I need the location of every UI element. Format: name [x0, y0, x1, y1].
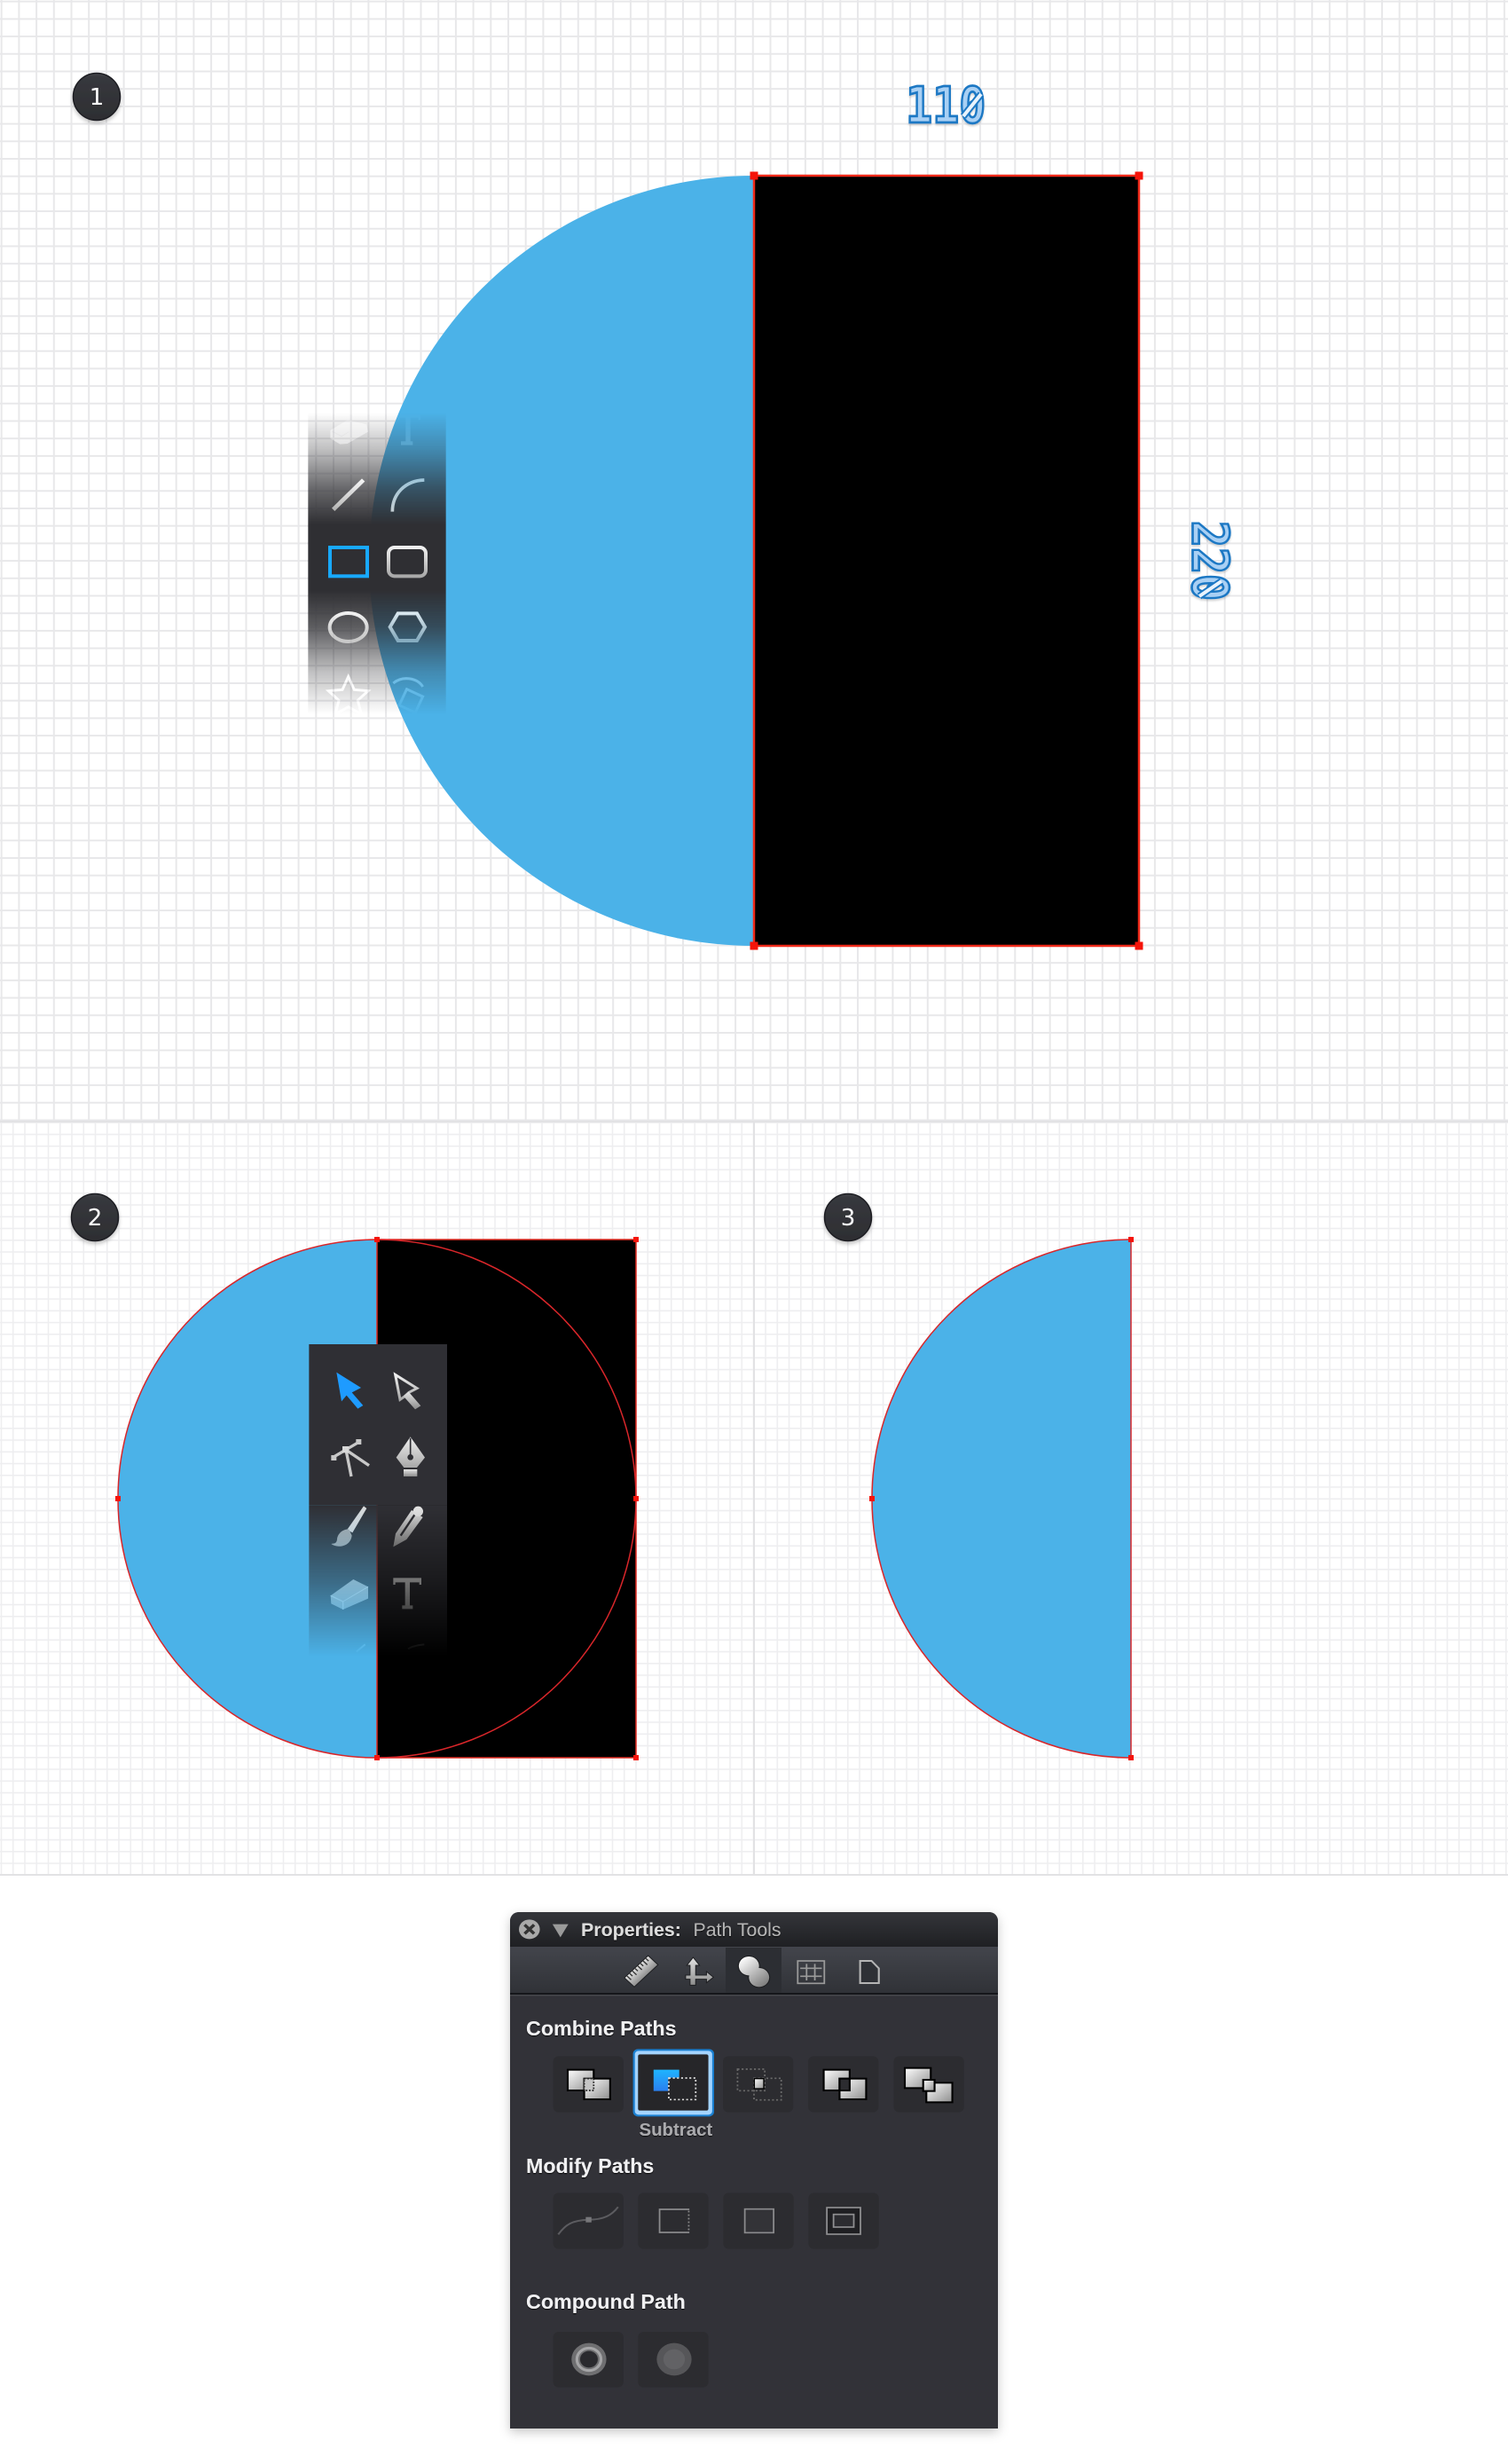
panel: Properties Path Tools — [510, 1912, 998, 2429]
icon: exclude — [824, 2070, 866, 2099]
icon: move arrows — [686, 1957, 713, 1985]
icon: rounded rectangle tool — [389, 547, 426, 576]
shape: blue half circle, step 1 — [369, 176, 754, 946]
icon: pen tool — [397, 1437, 425, 1476]
icon: pencil tool — [393, 1507, 423, 1547]
icon: subtract — [654, 2070, 695, 2099]
badge: step 3: 3 — [841, 1205, 855, 1232]
icon: inset rectangle — [827, 2208, 860, 2234]
shape: resulting blue half circle, step 3 — [869, 1237, 1134, 1760]
panel: step 2 grid background — [0, 1122, 754, 1876]
icon: closed rectangle — [745, 2209, 774, 2232]
dimension label: 220: 220 — [1181, 521, 1238, 601]
dimension label: 110: 110 — [906, 76, 986, 135]
icon: intersect — [737, 2069, 781, 2100]
icon: transform tool — [393, 679, 423, 712]
tab bar — [510, 1947, 998, 1993]
icon: document — [860, 1961, 879, 1983]
icon: path blob — [738, 1956, 770, 1988]
heading: Combine Paths: Combine Paths — [526, 2017, 677, 2040]
buttons: compound path row — [554, 2332, 709, 2388]
icon: polygon tool — [390, 613, 425, 641]
shape: black rectangle with red outline and handles, step 1 — [750, 172, 1143, 949]
tool palette: shape tools, faded — [308, 413, 446, 714]
panel: step 1 grid background — [0, 0, 1508, 1122]
icon: brush tool — [331, 1506, 366, 1547]
icon: divide — [905, 2068, 953, 2102]
buttons: combine paths row — [554, 2049, 964, 2116]
icon: open rectangle — [660, 2209, 689, 2232]
active tab — [726, 1948, 781, 1993]
tool palette: selection and drawing tools, fading at bottom — [309, 1344, 447, 1659]
icon: disclosure triangle — [553, 1925, 569, 1937]
icon: unite — [568, 2070, 610, 2099]
icon: curve with node — [558, 2207, 618, 2234]
title: Path Tools: Path Tools — [694, 1919, 781, 1940]
label: Subtract: Subtract — [639, 2121, 712, 2140]
badge: step 1: 1 — [90, 84, 104, 111]
badge: step 2 — [71, 1194, 119, 1240]
icon: make compound path — [571, 2343, 607, 2375]
icon: direct selection arrow — [396, 1374, 420, 1409]
icon: close button — [519, 1919, 540, 1939]
icon: star tool — [328, 677, 368, 714]
buttons: modify paths row — [554, 2192, 879, 2249]
icon: faint tools cut off by the fade — [358, 1643, 424, 1650]
heading: Modify Paths: Modify Paths — [526, 2154, 654, 2177]
icon: arc tool — [392, 480, 424, 512]
badge: step 3 — [825, 1194, 871, 1240]
icon: eraser tool — [331, 1579, 368, 1610]
title bar — [510, 1912, 998, 1947]
heading: Compound Path: Compound Path — [526, 2290, 686, 2313]
icon: line tool — [332, 478, 365, 511]
icon: selection arrow active — [336, 1373, 363, 1409]
icon: release compound path — [656, 2343, 692, 2375]
icon: ruler — [624, 1956, 658, 1987]
panel: step 3 grid background — [0, 1121, 1508, 1876]
badge: step 1 — [73, 73, 121, 121]
icon: rectangle tool active — [330, 547, 367, 576]
icon: grid — [797, 1961, 824, 1983]
icon: type tool — [401, 424, 413, 445]
title: Properties: Properties: — [581, 1919, 681, 1940]
icon: type tool — [393, 1578, 421, 1609]
badge: step 2: 2 — [88, 1205, 102, 1232]
icon: ellipse tool — [330, 613, 367, 642]
icon: eraser — [330, 422, 368, 444]
shape: circle and black rectangle, step 2 — [115, 1237, 639, 1760]
icon: node tool — [331, 1439, 369, 1476]
